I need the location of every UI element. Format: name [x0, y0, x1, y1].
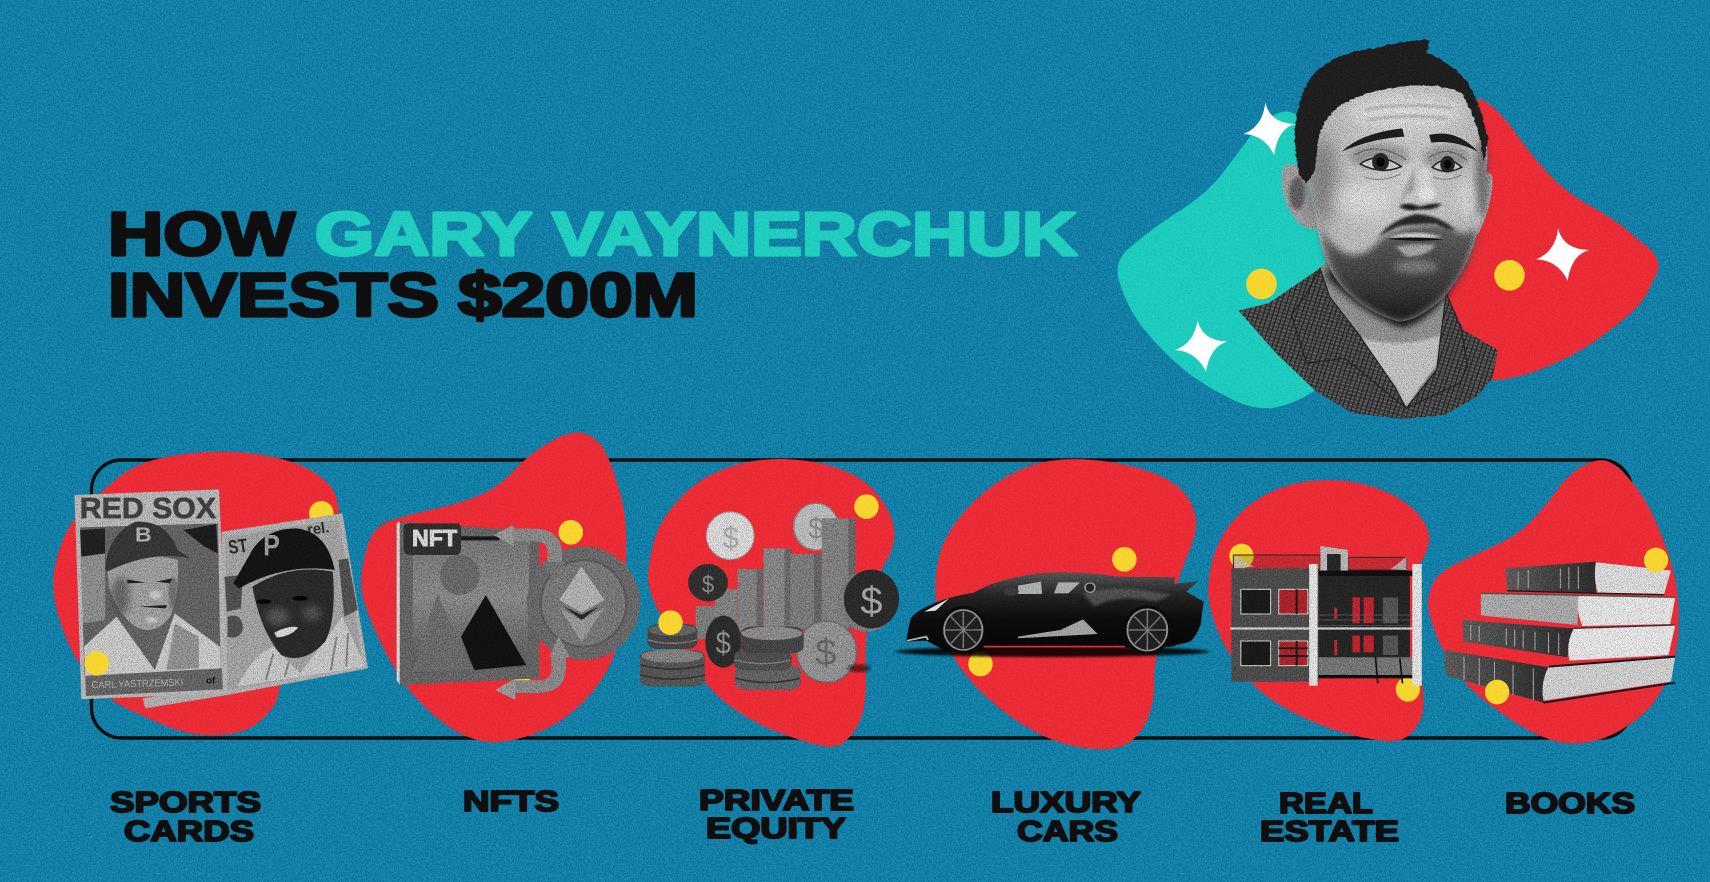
- yellow dot: [309, 501, 334, 526]
- nose: [1398, 167, 1441, 211]
- red blob: private equity: [648, 459, 894, 747]
- title word: HOW: HOW: [108, 200, 295, 269]
- label: luxury cars: CARS: [1017, 816, 1118, 848]
- face: [252, 569, 334, 658]
- mouth: [1386, 233, 1444, 257]
- right block: [1319, 571, 1410, 678]
- collar left: [1291, 268, 1406, 408]
- left ear: [1282, 164, 1318, 229]
- side vent ring: [1085, 583, 1095, 592]
- stubble beard: [1320, 220, 1477, 322]
- helmet letter: P: [263, 529, 280, 562]
- label: real estate: ESTATE: [1260, 816, 1399, 848]
- coin shadow: [848, 664, 871, 672]
- front wheel: [940, 606, 987, 654]
- label: sports cards: SPORTS: [110, 787, 261, 819]
- yellow dot: [559, 520, 583, 545]
- front splitter: [907, 637, 928, 641]
- sphere: [440, 555, 480, 595]
- label: real estate: [1260, 788, 1399, 848]
- large gray coin: $: [815, 632, 837, 673]
- red blob: sports cards: [53, 452, 339, 735]
- collar right: [1406, 293, 1467, 408]
- label: books: BOOKS: [1505, 788, 1635, 820]
- label: real estate: REAL: [1279, 788, 1373, 820]
- NFT frame icon: [397, 522, 539, 685]
- body: [906, 572, 1204, 651]
- yellow dot: [84, 651, 109, 676]
- yellow dot: [1644, 548, 1668, 572]
- bar chart: [696, 518, 855, 639]
- red blob: NFTs: [361, 433, 626, 742]
- shoulder highlight: [1083, 589, 1171, 607]
- face: [1300, 68, 1487, 322]
- face side shading: [1309, 96, 1488, 223]
- yellow dot: [1112, 547, 1137, 572]
- large gray coin: [797, 621, 857, 682]
- third book: [1462, 620, 1675, 661]
- sparkle: [1175, 321, 1227, 372]
- hair: [1295, 40, 1488, 183]
- yellow dot: [1485, 680, 1509, 704]
- sparkle: [1536, 228, 1589, 281]
- silver coin: [794, 503, 838, 550]
- dark coin with rim: [838, 570, 899, 632]
- base balcony: [1319, 657, 1413, 676]
- NFT badge: [404, 523, 461, 555]
- Ethereum coin: [527, 547, 640, 660]
- red blob: [1406, 99, 1659, 380]
- jersey: [84, 613, 221, 675]
- portrait panel: Gary Vaynerchuk with blobs: [1118, 40, 1659, 419]
- light triangle: [412, 593, 474, 673]
- white columns: [1309, 564, 1318, 686]
- yellow dot: [1229, 544, 1254, 568]
- card lettering: ST: [227, 535, 249, 559]
- windows: [1018, 582, 1080, 594]
- yellow dot: [1494, 260, 1525, 291]
- teal blob: [1118, 111, 1368, 408]
- neck: [1320, 247, 1446, 408]
- label: sports cards: [110, 787, 261, 848]
- dark coin: $: [702, 572, 714, 598]
- NFT artwork: [397, 522, 640, 700]
- yellow dot: [658, 610, 683, 635]
- helmet: [233, 528, 335, 588]
- arrow: bottom exchange: [495, 636, 570, 700]
- bottom book: [1444, 650, 1675, 703]
- top book: [1506, 562, 1671, 595]
- balcony rail: [1319, 615, 1413, 625]
- title name: Gary Vaynerchuk: GARY VAYNERCHUK: [315, 200, 1077, 269]
- left block: [1231, 568, 1319, 682]
- label: sports cards: CARDS: [124, 816, 254, 848]
- windows left: [1241, 589, 1308, 666]
- coin stack left: [640, 624, 705, 687]
- card lettering: rel.: [306, 519, 330, 539]
- arrow: top exchange: [493, 525, 566, 580]
- dark coin with rim: $: [860, 579, 883, 622]
- label: luxury cars: LUXURY: [991, 787, 1141, 819]
- left brow: [1342, 128, 1404, 152]
- cap: [105, 522, 190, 572]
- photo background: [80, 523, 221, 675]
- portrait photo illustration: [1239, 40, 1498, 419]
- player name: CARL YASTRZEMSKI: [91, 677, 184, 691]
- cap letter: B: [135, 523, 152, 546]
- silver coin: $: [723, 520, 739, 556]
- book stack: [1444, 562, 1675, 703]
- floor slab: [1230, 627, 1413, 630]
- dark coin: [705, 616, 741, 668]
- sparkle: [1244, 103, 1295, 155]
- yellow dot: [1246, 269, 1277, 299]
- position: of: [206, 676, 216, 686]
- side intake: [1018, 619, 1098, 638]
- coin stack center: [734, 627, 804, 690]
- NFT badge text: NFT: [412, 526, 457, 552]
- front baseball card: [74, 489, 228, 699]
- eye sockets: [1349, 143, 1470, 169]
- face: [107, 556, 178, 630]
- silver coin: [706, 512, 754, 559]
- red blob: books: [1428, 460, 1679, 744]
- neck shadow: [1326, 253, 1446, 328]
- t-shirt chest: [1356, 335, 1441, 407]
- side mirror: [1003, 588, 1019, 596]
- label: luxury cars: [991, 787, 1141, 848]
- title word: INVESTS: INVESTS: [108, 261, 439, 330]
- facial features: [127, 578, 172, 608]
- yellow dot: [1396, 677, 1420, 702]
- red trim: [984, 644, 1125, 649]
- shirt: [1239, 268, 1498, 419]
- jersey: [237, 617, 365, 687]
- dark coin: [688, 564, 728, 601]
- second book: [1481, 593, 1675, 626]
- sports car: [896, 572, 1209, 657]
- title amount: $200M: $200M: [458, 261, 698, 330]
- dark coin: $: [716, 625, 731, 661]
- roof rail: [1233, 555, 1407, 570]
- name bar: [85, 668, 223, 696]
- building: [1230, 546, 1422, 686]
- rear wheel: [1123, 605, 1172, 655]
- cheek light and features: [266, 608, 289, 625]
- stairs: [1375, 657, 1402, 683]
- left eye: [1354, 149, 1406, 179]
- chin patch highlight: [1394, 260, 1438, 273]
- silver coin: $: [808, 511, 824, 545]
- label: private equity: [699, 785, 854, 845]
- ground shadow: [896, 646, 1209, 657]
- headlight: [924, 598, 949, 612]
- back baseball card: [143, 513, 368, 708]
- roof stair tower: [1320, 546, 1348, 571]
- dark triangle: [461, 595, 526, 670]
- right ear: [1477, 172, 1493, 237]
- red blob: real estate: [1208, 480, 1429, 741]
- label: private equity: EQUITY: [706, 813, 846, 845]
- label: NFTs: NFTS: [463, 786, 559, 818]
- title: [108, 200, 1077, 330]
- windows right: [1334, 597, 1374, 655]
- coins and bar chart: [640, 503, 899, 690]
- right brow: [1429, 134, 1478, 152]
- investment track outline: [92, 460, 1632, 738]
- team name: RED SOX: [80, 492, 216, 524]
- yellow dot: [513, 678, 531, 686]
- panel: real estate and books artwork: [1208, 460, 1679, 744]
- right eye: [1428, 152, 1467, 179]
- panel: private equity and luxury cars artwork: [640, 459, 1209, 749]
- yellow dot: [968, 652, 993, 676]
- yellow dot: [854, 494, 879, 519]
- card background shapes: [224, 558, 358, 637]
- red blob: luxury cars: [935, 459, 1196, 749]
- panel: sports cards and NFTs artwork: [53, 433, 640, 742]
- label: private equity: PRIVATE: [699, 785, 854, 817]
- moustache: [1379, 214, 1455, 237]
